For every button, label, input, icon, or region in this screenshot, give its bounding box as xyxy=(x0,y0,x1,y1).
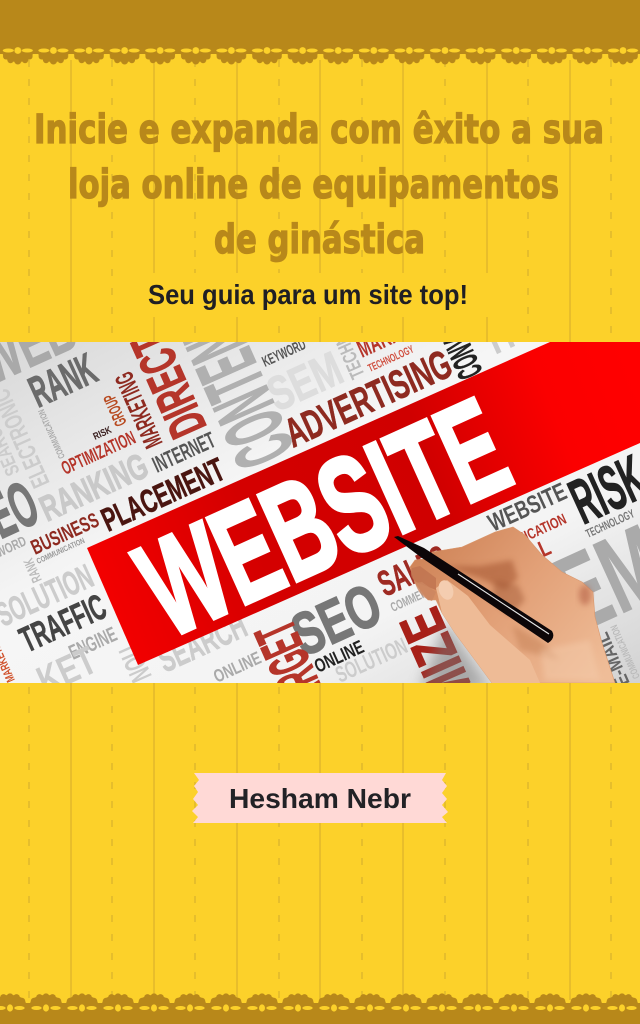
word cloud: COMMUNICATION xyxy=(476,511,569,566)
pen xyxy=(394,536,553,643)
word cloud: GROUP xyxy=(100,391,131,429)
word cloud: ENGINE xyxy=(66,623,121,665)
word cloud: RANK xyxy=(20,556,45,585)
word cloud xyxy=(0,252,640,729)
word cloud: IT xyxy=(484,319,525,361)
author ribbon: Hesham Nebr xyxy=(229,783,411,814)
red banner xyxy=(87,342,640,665)
word cloud: BUSINESS xyxy=(28,509,103,560)
word cloud: INTERNET xyxy=(148,427,219,478)
word cloud: KET xyxy=(30,638,103,703)
word cloud: TRAFFIC xyxy=(13,586,112,660)
bottom ornamental band xyxy=(0,990,640,1024)
title: de ginástica xyxy=(214,217,425,263)
word cloud: MARKETING xyxy=(109,367,168,453)
word cloud: SEM xyxy=(260,342,351,422)
word cloud: RISK xyxy=(92,425,114,443)
word cloud: TARGET xyxy=(243,611,343,729)
word cloud: RANKING xyxy=(33,445,154,529)
word cloud: WEBSITE xyxy=(484,478,571,537)
subtitle: Seu guia para um site top! xyxy=(148,279,468,310)
author ribbon xyxy=(192,773,448,823)
word cloud: SOLUTION xyxy=(331,632,411,688)
word cloud: TECHNOLOGY xyxy=(366,343,416,375)
icon: hand holding pen xyxy=(410,527,615,690)
word cloud: COMMUNICATION xyxy=(36,408,67,460)
word cloud: COMMERCE xyxy=(388,580,440,615)
word cloud: KEYWORD xyxy=(260,336,309,371)
word cloud: MIZE xyxy=(388,599,488,717)
word cloud: ONLINE xyxy=(311,637,367,678)
word cloud: ADVERTISING xyxy=(278,341,459,456)
word cloud: E-MAIL xyxy=(591,629,635,690)
word cloud: SEO xyxy=(282,571,391,669)
word cloud: OPTIMIZATION xyxy=(58,428,139,480)
word cloud: MARKETING xyxy=(353,301,446,363)
word cloud: PLACEMENT xyxy=(96,450,230,538)
word cloud: DIGITAL xyxy=(480,534,555,587)
word cloud: SALES xyxy=(371,537,454,604)
title xyxy=(34,107,604,263)
photo: website word cloud with hand xyxy=(0,252,640,729)
word cloud: SEARCH xyxy=(151,604,253,680)
word cloud: RANK xyxy=(22,344,104,417)
word cloud: COMMUNICATION xyxy=(35,536,86,566)
word cloud: TION xyxy=(111,637,157,687)
top ornamental band xyxy=(0,0,640,70)
word cloud: ONLINE xyxy=(210,648,264,687)
